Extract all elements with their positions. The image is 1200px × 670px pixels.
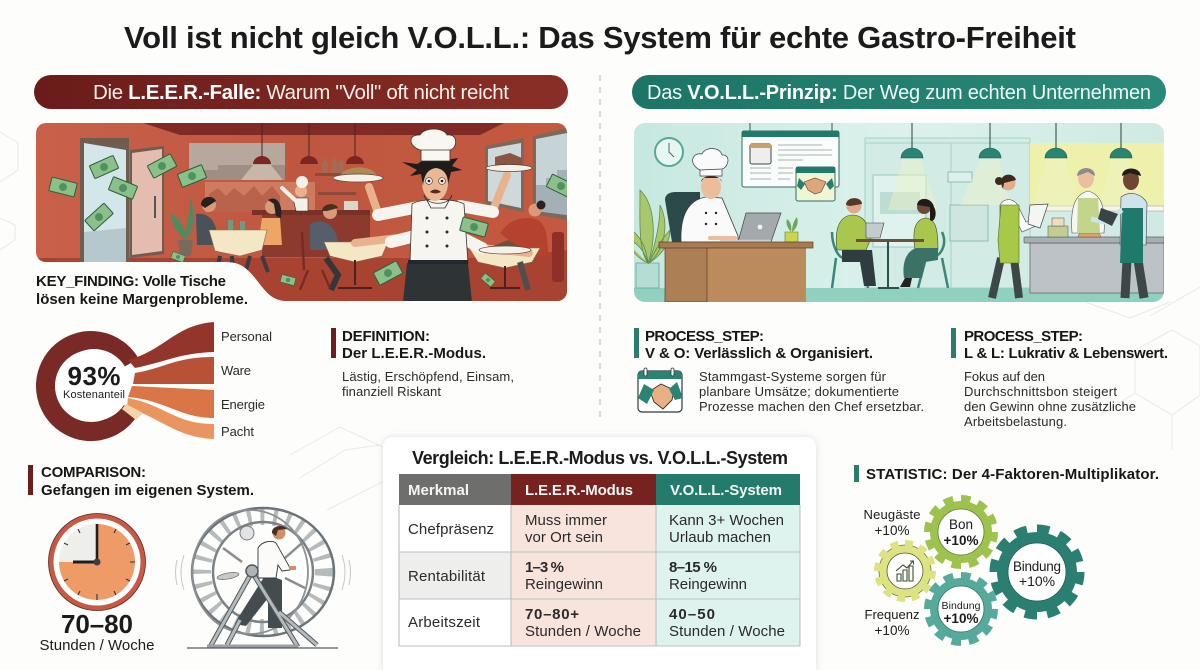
label: Personal: Personal (221, 329, 272, 344)
pendant lamps (241, 123, 364, 180)
flow: Ware (133, 357, 214, 384)
illustration: organised restaurant (621, 123, 1164, 302)
statistic heading: STATISTIC: Der 4-Faktoren-Multiplikator. (866, 466, 1159, 483)
definition block: finanziell Riskant (342, 384, 441, 399)
process step L and L: Arbeitsbelastung. (964, 414, 1067, 429)
comparison table card (383, 437, 816, 670)
table body: Rentabilität (408, 568, 486, 585)
clock caption: Stunden / Woche (40, 637, 154, 654)
chef at desk (665, 148, 738, 242)
label: Energie: Energie (221, 397, 265, 412)
table body: Reingewinn (525, 576, 603, 593)
back window and bar (189, 143, 370, 257)
table body: Kann 3+ Wochen (669, 512, 784, 529)
stressed chef (355, 129, 529, 302)
schedule board (742, 123, 839, 201)
label: Neugäste: Neugäste (864, 507, 920, 522)
desk (659, 242, 813, 302)
flying money (49, 154, 576, 287)
table body: Merkmal (408, 482, 469, 499)
label: Frequenz: Frequenz (864, 607, 920, 622)
small desk plant (785, 217, 798, 242)
gear: Bindung small: +10% (944, 611, 978, 626)
flow: Pacht (127, 398, 214, 439)
label: Pacht: Pacht (221, 424, 254, 439)
process step L and L: Fokus auf den (964, 369, 1045, 384)
gear: Bindung small (928, 576, 994, 642)
table body: L.E.E.R.-Modus (525, 482, 633, 499)
plates of food (333, 153, 532, 254)
plant (170, 198, 195, 256)
process step L and L: PROCESS_STEP: (964, 328, 1083, 345)
table body: vor Ort sein (525, 529, 603, 546)
process step L and L: den Gewinn ohne zusätzliche (964, 399, 1136, 414)
cook behind counter (1072, 168, 1104, 233)
title: Voll ist nicht gleich V.O.L.L.: Das System für echte Gastro-Freiheit (124, 20, 1076, 55)
table body: Stunden / Woche (669, 623, 785, 640)
table body: Chefpräsenz (408, 521, 494, 538)
gear: small chart (877, 543, 933, 599)
key finding callout: KEY_FINDING: Volle Tische (36, 273, 226, 290)
right heading pill (632, 75, 1166, 109)
hamster wheel with runner (176, 508, 350, 648)
left heading pill: Die L.E.E.R.-Falle: Warum "Voll" oft nicht reicht (93, 81, 509, 104)
table body: 40–50 (669, 606, 715, 623)
counter (1024, 218, 1164, 293)
table body: 8–15 % (669, 559, 717, 576)
table body: 70–80+ (525, 606, 579, 623)
right windows and diner (469, 128, 567, 290)
plant (634, 189, 670, 288)
gear: Bon (928, 498, 994, 566)
table body: Stunden / Woche (525, 623, 641, 640)
clock value: 70–80 (61, 609, 133, 639)
table body: Muss immer (525, 512, 607, 529)
table body: V.O.L.L.-System (670, 482, 782, 499)
waiter with tablet (1091, 168, 1147, 298)
gear: Bindung large: +10% (1019, 573, 1055, 589)
table title: Vergleich: L.E.E.R.-Modus vs. V.O.L.L.-System (412, 448, 788, 468)
floor (634, 288, 1164, 302)
process step V and O: V & O: Verlässlich & Organisiert. (645, 345, 873, 362)
donut caption: Kostenanteil (63, 389, 125, 401)
illustration: chaotic full restaurant (36, 123, 576, 302)
label: Ware: Ware (221, 363, 251, 378)
kitchen background (865, 138, 1164, 288)
flow: Personal (128, 322, 214, 368)
gear: Bindung large: Bindung (1013, 559, 1061, 574)
process step L and L (951, 328, 1168, 429)
label: Frequenz (864, 607, 920, 638)
gear: Bon: Bon (949, 517, 973, 532)
process step V and O: planbare Umsätze; dokumentierte (699, 384, 899, 399)
comparison heading (28, 464, 254, 499)
table body (399, 474, 800, 646)
table body: Arbeitszeit (408, 614, 481, 631)
flow: Energie (128, 386, 214, 418)
table body: Reingewinn (669, 576, 747, 593)
comparison heading: Gefangen im eigenen System. (41, 482, 254, 499)
process step V and O: Prozesse machen den Chef ersetzbar. (699, 399, 924, 414)
donut value: 93% (68, 361, 120, 391)
label: Frequenz: +10% (875, 623, 909, 638)
team at table (832, 198, 948, 288)
right heading pill: Das V.O.L.L.-Prinzip: Der Weg zum echten Unternehmen (647, 82, 1151, 104)
door (80, 138, 164, 262)
process step V and O (634, 328, 924, 414)
donut and sankey chart (45, 322, 272, 439)
donut ring (45, 341, 130, 432)
four factor gears (864, 498, 1080, 642)
gear: Bindung small: Bindung (942, 600, 981, 612)
waitress with menu (992, 175, 1048, 298)
process step L and L: Durchschnittsbon steigert (964, 384, 1117, 399)
wall clock (655, 138, 683, 166)
lamps (888, 123, 1146, 210)
laptop (720, 213, 781, 242)
comparison heading: COMPARISON: (41, 464, 146, 481)
diners at first table (196, 197, 282, 272)
key finding callout: lösen keine Margenprobleme. (36, 291, 248, 308)
definition block: Lästig, Erschöpfend, Einsam, (342, 369, 514, 384)
process step L and L: L & L: Lukrativ & Lebenswert. (964, 345, 1168, 362)
gear: Bon: +10% (944, 533, 978, 548)
diner at second table (300, 204, 388, 290)
table body: Urlaub machen (669, 529, 771, 546)
label: Neugäste (864, 507, 920, 538)
left heading pill (34, 75, 568, 109)
gear: Bindung large (994, 529, 1080, 615)
process step V and O: PROCESS_STEP: (645, 328, 764, 345)
icon: calendar handshake (638, 368, 683, 412)
definition block (331, 328, 514, 399)
label: Neugäste: +10% (875, 523, 909, 538)
definition block: DEFINITION: (342, 328, 430, 345)
definition block: Der L.E.E.R.-Modus. (342, 345, 486, 362)
clock icon (48, 514, 146, 610)
process step V and O: Stammgast-Systeme sorgen für (699, 369, 887, 384)
background cook (282, 176, 308, 211)
key finding callout (36, 273, 248, 308)
table body: 1–3 % (525, 559, 564, 576)
